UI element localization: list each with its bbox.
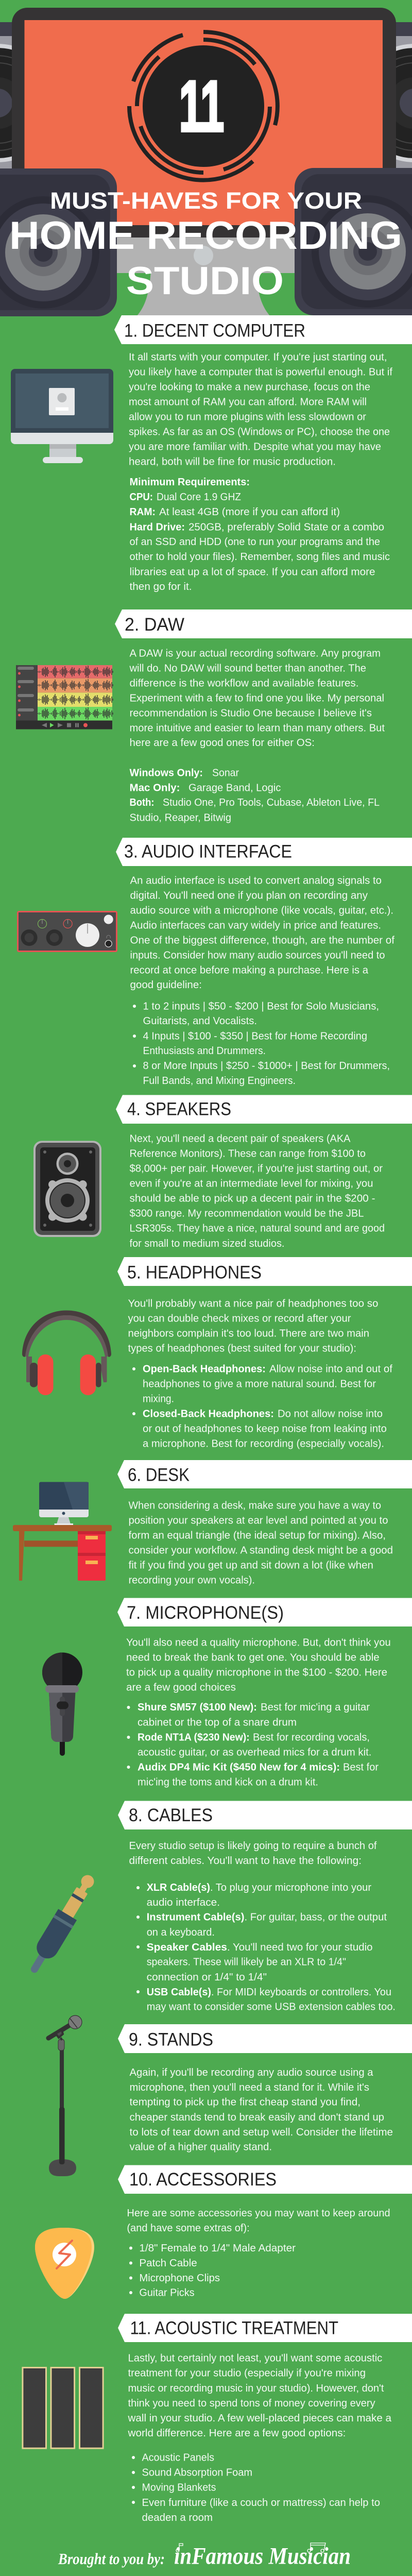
- list: accessories: Guitar Picks: [139, 2287, 195, 2299]
- panel: 1. decent computer: [11, 315, 412, 592]
- text block: speakers: Next, you'll need a decent pair of speakers (AKA: [130, 1133, 351, 1144]
- text block: DAW by OS: Studio One, Pro Tools, Cubase, Ableton Live, FL: [163, 797, 380, 808]
- list: headphone types: headphones to give a more natural sound. Best for: [143, 1379, 376, 1390]
- list: cable types: XLR Cable(s): [147, 1882, 210, 1893]
- panel: header illustration: [0, 8, 412, 316]
- list: cable types: speakers. These will likely be an XLR to 1/4": [147, 1957, 346, 1968]
- heading: 4. speakers: [116, 1095, 412, 1124]
- heading: 10. accessories: 10. ACCESSORIES: [129, 2170, 277, 2190]
- text block: DAW intro: will do. No DAW will sound better than another. The: [129, 663, 366, 674]
- heading: 6. desk: [117, 1460, 412, 1488]
- panel: 9. stands: [48, 2015, 412, 2176]
- icon: speaker: [33, 1141, 101, 1237]
- list: microphone choices: [127, 1702, 379, 1788]
- text block: DAW intro: difference is the workflow and available features.: [130, 678, 358, 689]
- text block: computer intro: most amount of RAM you can afford. More RAM will: [129, 397, 367, 408]
- text block: desk: fit if you find you get up and sit down a lot (like when: [129, 1560, 373, 1571]
- list: headphone types: mixing.: [143, 1393, 174, 1404]
- list: acoustic options: deaden a room: [142, 2512, 213, 2523]
- text block: acoustic intro: Lastly, but certainly not least, you'll want some acoustic: [128, 2353, 382, 2364]
- list: cable types: Instrument Cable(s): [147, 1912, 244, 1923]
- text block: stands: tempting to pick up the first cheap stand you find,: [130, 2097, 360, 2108]
- text block: cables intro: [129, 1840, 377, 1867]
- text block: stands: Again, if you'll be recording any audio source using a: [130, 2067, 373, 2078]
- text block: minimum requirements: CPU:: [130, 492, 153, 503]
- text block: minimum requirements: At least 4GB (more if you can afford it): [159, 506, 340, 518]
- icon: microphone: [42, 1653, 82, 1756]
- heading: 1. decent computer: [114, 315, 412, 344]
- text block: speakers: $8,000+ per pair. However, if you're just starting out, or: [130, 1163, 383, 1175]
- text block: DAW by OS: Both:: [130, 797, 154, 808]
- panel: 8. cables: [23, 1801, 412, 2013]
- icon: guitar pick: [35, 2228, 94, 2299]
- text block: computer intro: you likely have a computer that is powerful enough. But if: [129, 367, 392, 378]
- list: cable types: may want to consider some USB extension cables too.: [147, 2002, 396, 2013]
- list: microphone choices: Rode NT1A ($230 New):: [138, 1732, 250, 1743]
- monitor screen: [12, 8, 396, 238]
- text block: interface intro: record at once before making a purchase. Here is a: [130, 964, 369, 976]
- list: accessories: Patch Cable: [139, 2258, 197, 2269]
- text block: speakers: should be able to pick up a decent pair in the $200 -: [130, 1193, 375, 1205]
- text block: desk: recording your own vocals).: [129, 1574, 255, 1586]
- text block: DAW by OS: Windows Only:: [130, 768, 203, 779]
- text block: interface intro: An audio interface is used to convert analog signals to: [130, 875, 382, 887]
- text block: stands: cheaper stands tend to break easily and don't stand up: [130, 2112, 384, 2123]
- text block: minimum requirements: Hard Drive:: [130, 521, 185, 533]
- text block: DAW intro: [129, 648, 385, 749]
- title: MUST-HAVES FOR YOUR: [50, 188, 362, 214]
- text block: interface intro: [130, 875, 394, 991]
- text block: computer intro: allow you to run more plugins with less slowdown or: [129, 412, 366, 423]
- list: acoustic options: Acoustic Panels: [142, 2452, 214, 2464]
- text block: interface intro: Audio interfaces can vary widely in price and features.: [130, 920, 381, 931]
- text block: desk: When considering a desk, make sure you have a way to: [129, 1500, 381, 1512]
- list: microphone choices: Audix DP4 Mic Kit ($450 New for 4 mics):: [138, 1762, 340, 1773]
- panel: 11. acoustic treatment: [23, 2314, 412, 2523]
- list: interface guideline: [133, 1001, 390, 1087]
- text block: DAW intro: here are a few good ones for either OS:: [130, 737, 315, 749]
- text block: acoustic intro: wall in your studio. A few well-placed pieces can make a: [127, 2413, 392, 2424]
- icon: headphones: [22, 1311, 111, 1395]
- text block: speakers: for small to medium sized studios.: [130, 1238, 284, 1249]
- text block: interface intro: good guideline:: [130, 979, 202, 991]
- list: cable types: on a keyboard.: [147, 1927, 215, 1938]
- text block: microphones intro: [126, 1637, 391, 1693]
- icon: audio interface: [18, 912, 116, 951]
- title: [9, 188, 402, 303]
- heading: 8. cables: [118, 1801, 412, 1829]
- heading: 3. audio interface: [116, 838, 412, 866]
- text block: accessories intro: [127, 2208, 390, 2234]
- text block: acoustic intro: music or recording music in your studio). However, don't: [128, 2383, 384, 2394]
- heading: 3. audio interface: 3. AUDIO INTERFACE: [124, 842, 292, 862]
- list: headphone types: Open-Back Headphones:: [143, 1363, 266, 1375]
- heading: 2. DAW: 2. DAW: [125, 615, 184, 635]
- list: accessories: Microphone Clips: [139, 2273, 220, 2284]
- text block: acoustic intro: [127, 2353, 392, 2439]
- text block: computer intro: spikes. As far as an OS (Windows or PC), choose the one: [129, 427, 390, 438]
- text block: desk: position your speakers at ear level and pointed at you to: [129, 1515, 388, 1527]
- text block: microphones intro: are a few good choices: [126, 1682, 236, 1693]
- text block: minimum requirements: then go for it.: [130, 581, 192, 592]
- heading: 10. accessories: [118, 2165, 412, 2194]
- back speaker left: [0, 22, 57, 172]
- text block: headphones intro: types of headphones (best suited for your studio):: [128, 1343, 356, 1354]
- text block: minimum requirements: other to hold your files). Remember, song files and music: [130, 551, 390, 563]
- list: microphone choices: Shure SM57 ($100 New):: [138, 1702, 257, 1713]
- text block: minimum requirements: [130, 477, 390, 592]
- heading: 11. acoustic treatment: [118, 2314, 412, 2342]
- text block: DAW by OS: [130, 768, 380, 823]
- list: acoustic options: Sound Absorption Foam: [142, 2467, 252, 2479]
- text block: acoustic intro: think you need to spend tons of money covering every: [128, 2398, 375, 2409]
- text block: headphones intro: You'll probably want a nice pair of headphones too so: [128, 1298, 378, 1309]
- panel: 7. microphones: [42, 1598, 412, 1788]
- text block: DAW by OS: Mac Only:: [130, 782, 180, 793]
- text block: acoustic intro: world difference. Here are a few good options:: [127, 2428, 346, 2439]
- text block: speakers: even if you're at an intermediate level for mixing, you: [130, 1178, 373, 1189]
- text block: accessories intro: Here are some accessories you may want to keep around: [127, 2208, 390, 2219]
- icon: acoustic panels: [23, 2368, 103, 2448]
- list: interface guideline: 1 to 2 inputs | $50 - $200 | Best for Solo Musicians,: [143, 1001, 379, 1012]
- icon: computer: [11, 369, 113, 463]
- panel: 5. headphones: [22, 1257, 412, 1450]
- heading: 7. microphones: [117, 1598, 412, 1626]
- panel: 10. accessories: [35, 2165, 412, 2299]
- text block: DAW intro: Experiment with a few to find one you like. My personal: [130, 692, 384, 704]
- text block: headphones intro: you can double check mixes or record after your: [128, 1313, 351, 1325]
- footer: brought to you by: inFamous Musician: [174, 2543, 351, 2570]
- list: accessories: 1/8" Female to 1/4" Male Adapter: [139, 2243, 296, 2254]
- text block: speakers: [130, 1133, 385, 1249]
- text block: headphones intro: neighbors complain it's too loud. There are two main: [128, 1328, 369, 1340]
- icon: music notes: [176, 2543, 325, 2552]
- list: headphone types: Allow noise into and out of: [269, 1363, 392, 1375]
- heading: 5. headphones: [117, 1257, 412, 1286]
- monitor stand: [116, 234, 295, 316]
- heading: 9. stands: 9. STANDS: [129, 2030, 213, 2049]
- list: microphone choices: Best for: [343, 1762, 379, 1773]
- text block: stands: microphone, then you'll need a stand for it. While it's: [130, 2082, 369, 2093]
- panel: 3. audio interface: [18, 838, 412, 1087]
- heading: 11. acoustic treatment: 11. ACOUSTIC TREATMENT: [130, 2318, 338, 2338]
- text block: cables intro: different cables. You'll want to have the following:: [129, 1855, 362, 1867]
- list: acoustic options: [132, 2452, 380, 2523]
- text block: computer intro: [129, 352, 392, 468]
- text block: computer intro: It all starts with your computer. If you're just starting out,: [129, 352, 387, 363]
- text block: desk: form an equal triangle (the ideal setup for mixing). Also,: [129, 1530, 386, 1541]
- heading: 2. DAW: [115, 609, 412, 638]
- text block: interface intro: One of the biggest difference, though, are the number of: [130, 935, 394, 946]
- list: interface guideline: Full Bands, and Mixing Engineers.: [143, 1075, 296, 1087]
- text block: speakers: $300 range. My recommendation would be the JBL: [130, 1208, 364, 1219]
- heading: 5. headphones: 5. HEADPHONES: [127, 1262, 262, 1283]
- text block: desk: [129, 1500, 393, 1586]
- heading: 9. stands: [118, 2024, 412, 2053]
- list: headphone types: a microphone. Best for recording (especially vocals).: [143, 1438, 384, 1450]
- list: interface guideline: Guitarists, and Vocalists.: [143, 1015, 257, 1027]
- icon: jack cable: [23, 1870, 100, 1978]
- text block: interface intro: audio source with a microphone (like vocals, guitar, etc.).: [130, 905, 393, 917]
- list: microphone choices: cabinet or the top of a snare drum: [138, 1717, 297, 1728]
- text block: minimum requirements: libraries eat up a lot of space. If you can afford more: [130, 566, 375, 578]
- list: headphone types: [132, 1363, 392, 1450]
- text block: accessories intro: (and have some extras of):: [127, 2223, 250, 2234]
- text block: minimum requirements: RAM:: [130, 506, 156, 518]
- text block: computer intro: you're looking to make a new purchase, focus on the: [129, 382, 370, 393]
- text block: speakers: Reference Monitors). These can range from $100 to: [130, 1148, 366, 1160]
- list: acoustic options: Moving Blankets: [142, 2482, 216, 2494]
- list: microphone choices: acoustic guitar, or as overhead mics for a drum kit.: [138, 1747, 371, 1758]
- number badge: [129, 32, 278, 180]
- front speaker right: [295, 168, 412, 315]
- icon: desk with computer: [13, 1482, 112, 1581]
- list: headphone types: or out of headphones to keep noise from leaking into: [143, 1423, 387, 1435]
- text block: headphones intro: [128, 1298, 378, 1354]
- text block: DAW by OS: Studio, Reaper, Bitwig: [130, 812, 231, 823]
- title: STUDIO: [126, 259, 284, 303]
- list: headphone types: Do not allow noise into: [278, 1408, 383, 1419]
- panel: 6. desk: [13, 1460, 412, 1586]
- text block: stands: [130, 2067, 393, 2153]
- list: headphone types: Closed-Back Headphones:: [143, 1408, 274, 1419]
- list: cable types: . For guitar, bass, or the output: [244, 1912, 387, 1923]
- text block: desk: consider your workflow. A standing desk might be a good: [129, 1545, 393, 1556]
- list: microphone choices: Best for mic'ing a guitar: [261, 1702, 370, 1713]
- title: HOME RECORDING: [9, 214, 402, 258]
- back speaker right: [355, 22, 412, 172]
- text block: minimum requirements: Minimum Requirements:: [130, 477, 250, 488]
- list: cable types: connection or 1/4" to 1/4": [147, 1972, 267, 1983]
- list: cable types: Speaker Cables: [147, 1942, 227, 1953]
- icon: microphone stand: [48, 2015, 82, 2176]
- text block: DAW intro: more intuitive and easier to learn than many others. But: [130, 722, 385, 734]
- text block: minimum requirements: 250GB, preferably Solid State or a combo: [188, 521, 384, 533]
- heading: 8. cables: 8. CABLES: [129, 1805, 213, 1825]
- heading: 1. decent computer: 1. DECENT COMPUTER: [124, 320, 305, 341]
- icon: DAW waveform screen: [16, 665, 113, 730]
- text block: interface intro: digital. You'll need one if you plan on recording any: [130, 890, 368, 902]
- list: interface guideline: Enthusiasts and Drummers.: [143, 1045, 266, 1057]
- list: cable types: USB Cable(s): [147, 1987, 211, 1998]
- text block: interface intro: inputs. Consider how many audio sources you'll need to: [130, 950, 385, 961]
- text block: minimum requirements: of an SSD and HDD (one to run your programs and the: [130, 536, 380, 548]
- text block: microphones intro: to pick up a quality microphone in the $100 - $200. Here: [126, 1667, 387, 1679]
- list: cable types: . To plug your microphone into your: [210, 1882, 371, 1893]
- footer: brought to you by: [58, 2543, 351, 2570]
- list: accessories: [129, 2243, 296, 2299]
- list: interface guideline: 8 or More Inputs | $250 - $1000+ | Best for Drummers,: [143, 1060, 390, 1072]
- heading: 6. desk: 6. DESK: [128, 1465, 190, 1485]
- list: microphone choices: Best for recording vocals,: [253, 1732, 370, 1743]
- text block: microphones intro: need to break the bank to get one. You should be able: [126, 1652, 380, 1663]
- front speaker left: [0, 168, 117, 316]
- text block: DAW by OS: Sonar: [212, 768, 239, 779]
- list: cable types: . For MIDI keyboards or controllers. You: [211, 1987, 391, 1998]
- text block: DAW by OS: Garage Band, Logic: [188, 782, 281, 793]
- text block: stands: value of a higher quality stand.: [130, 2142, 272, 2153]
- list: interface guideline: 4 Inputs | $100 - $350 | Best for Home Recording: [143, 1030, 367, 1042]
- number badge: 11: [179, 66, 224, 146]
- text block: cables intro: Every studio setup is likely going to require a bunch of: [129, 1840, 377, 1852]
- text block: DAW intro: A DAW is your actual recording software. Any program: [130, 648, 381, 659]
- text block: stands: to lots of tear down and setup well. Consider the lifetime: [130, 2127, 393, 2138]
- text block: DAW intro: recommendation is Studio One because I believe it's: [130, 708, 372, 719]
- list: microphone choices: mic'ing the toms and kick on a drum kit.: [138, 1776, 318, 1788]
- footer: brought to you by: Brought to you by:: [58, 2550, 165, 2568]
- text block: minimum requirements: Dual Core 1.9 GHZ: [157, 492, 241, 503]
- text block: microphones intro: You'll also need a quality microphone. But, don't think you: [126, 1637, 391, 1649]
- panel: 2. DAW: [16, 609, 412, 823]
- list: acoustic options: Even furniture (like a couch or mattress) can help to: [142, 2497, 380, 2509]
- list: cable types: audio interface.: [147, 1897, 220, 1908]
- list: cable types: . You'll need two for your studio: [227, 1942, 373, 1953]
- heading: 7. microphones: 7. MICROPHONE(S): [127, 1603, 284, 1623]
- text block: computer intro: you are more familiar with. Despite what you may have: [129, 442, 381, 453]
- heading: 4. speakers: 4. SPEAKERS: [127, 1099, 231, 1120]
- text block: computer intro: heard, both will be fine for music production.: [129, 456, 336, 468]
- text block: speakers: LSR305s. They have a nice, natural sound and are good: [130, 1223, 385, 1234]
- text block: acoustic intro: treatment for your studio (especially if you're mixing: [128, 2368, 366, 2379]
- panel: 4. speakers: [33, 1095, 412, 1249]
- list: cable types: [136, 1882, 396, 2013]
